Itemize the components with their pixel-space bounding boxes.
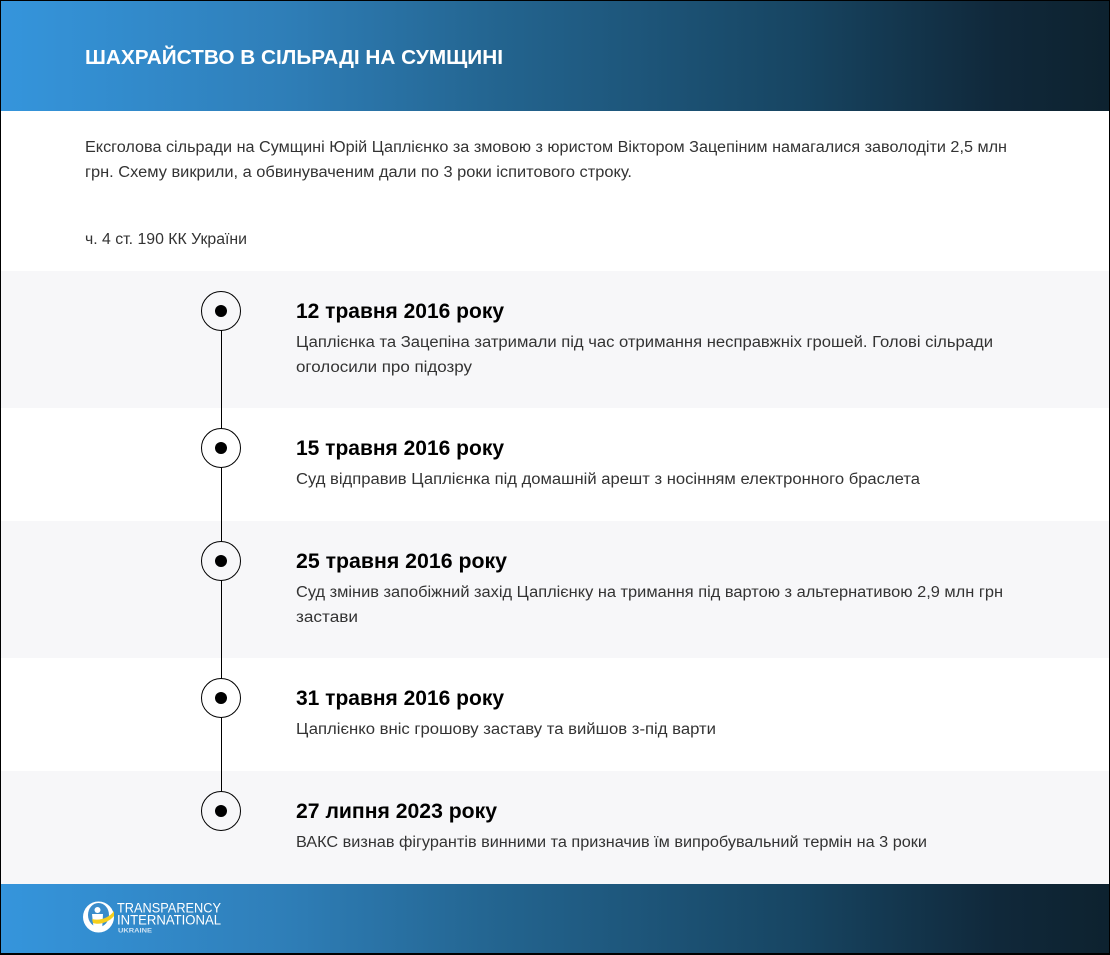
event 4: Цаплієнко вніс грошову заставу та вийшов з-під варти <box>296 721 716 738</box>
event 2: 15 травня 2016 року <box>296 437 504 460</box>
icon: Transparency International logo <box>83 902 114 932</box>
event 4 <box>296 687 716 738</box>
logo wordmark <box>117 900 221 934</box>
timeline marker 5 <box>202 792 240 830</box>
event 3: 25 травня 2016 року <box>296 550 507 573</box>
event 3: Суд змінив запобіжний захід Цаплієнку на тримання під вартою з альтернативою 2,9 млн грн <box>296 584 1003 601</box>
event 3: застави <box>296 609 358 626</box>
timeline marker 1 <box>202 292 240 330</box>
event 1: 12 травня 2016 року <box>296 300 504 323</box>
event 1 <box>296 300 993 376</box>
logo wordmark: TRANSPARENCY <box>117 900 221 916</box>
event 5: 27 липня 2023 року <box>296 800 497 823</box>
row 3 background <box>1 521 1109 658</box>
event 2 <box>296 437 920 488</box>
logo wordmark: UKRAINE <box>118 928 153 934</box>
event 5: ВАКС визнав фігурантів винними та призначив їм випробувальний термін на 3 роки <box>296 834 927 851</box>
header banner <box>1 1 1109 111</box>
legal article reference: ч. 4 ст. 190 КК України <box>85 231 247 248</box>
timeline connector line <box>220 311 222 811</box>
event 2: Суд відправив Цаплієнка під домашній арешт з носінням електронного браслета <box>296 471 920 488</box>
title: ШАХРАЙСТВО В СІЛЬРАДІ НА СУМЩИНІ <box>85 45 503 69</box>
event 5 <box>296 800 927 851</box>
intro text: грн. Схему викрили, а обвинуваченим дали по 3 роки іспитового строку. <box>85 164 632 181</box>
event 1: Цаплієнка та Зацепіна затримали під час отримання несправжніх грошей. Голові сільради <box>296 334 993 351</box>
event 4: 31 травня 2016 року <box>296 687 504 710</box>
timeline marker 4 <box>202 678 240 718</box>
event 3 <box>296 550 1003 626</box>
timeline marker 3 <box>202 542 240 580</box>
row 5 background <box>1 771 1109 884</box>
logo wordmark: INTERNATIONAL <box>117 912 221 928</box>
footer banner <box>1 884 1109 953</box>
intro text <box>85 139 1007 181</box>
event 1: оголосили про підозру <box>296 359 472 376</box>
timeline marker 2 <box>202 428 240 468</box>
row 1 background <box>1 271 1109 408</box>
intro text: Ексголова сільради на Сумщині Юрій Цаплієнко за змовою з юристом Віктором Зацепіним намагалися заволодіти 2,5 млн <box>85 139 1007 156</box>
